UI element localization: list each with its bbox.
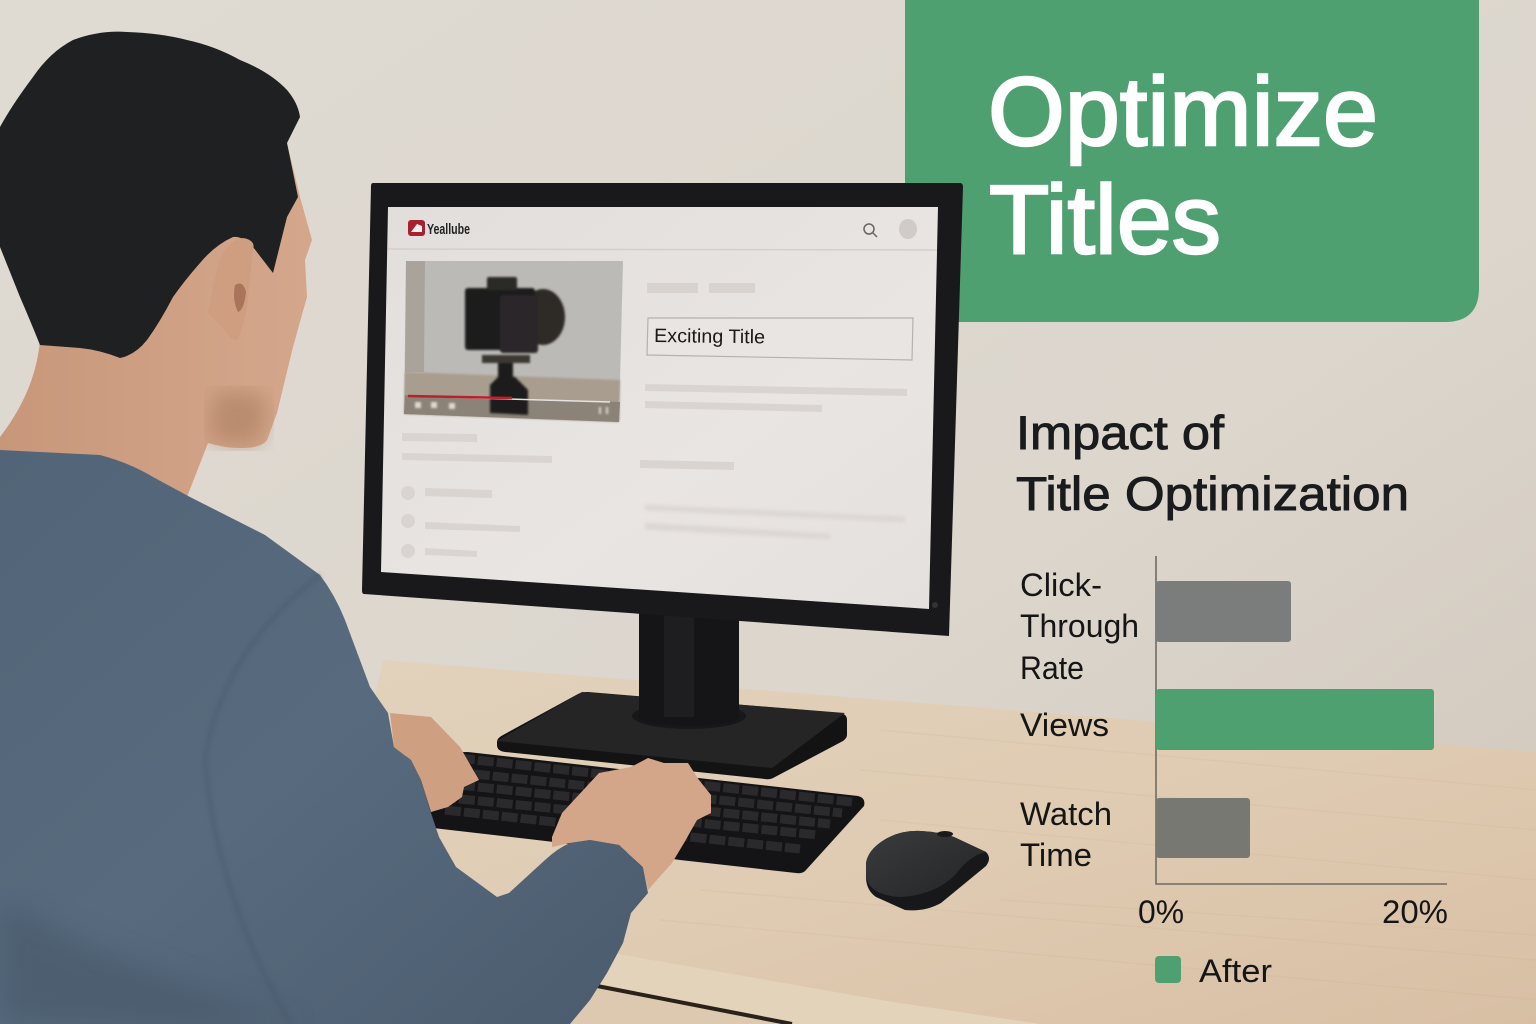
label: click-through rate [1020, 567, 1139, 686]
placeholder lines [401, 384, 907, 558]
label: click-through rate: Through [1020, 608, 1139, 644]
title input [647, 318, 913, 360]
axis label 0%: 0% [1138, 894, 1184, 930]
hair [0, 32, 300, 358]
chart heading [1016, 406, 1409, 520]
desk underside [570, 985, 790, 1024]
bar: views [1156, 689, 1434, 750]
site logo: Yeallube [427, 221, 470, 238]
site logo [408, 220, 470, 238]
label: watch time: Time [1020, 837, 1092, 873]
label: views: Views [1020, 707, 1109, 743]
monitor [362, 183, 963, 636]
title input: Exciting Title [654, 325, 765, 348]
chart heading: Impact of [1016, 406, 1225, 459]
camera [465, 277, 565, 415]
desk [285, 660, 1536, 1024]
title text: Optimize [988, 57, 1378, 166]
chart heading: Title Optimization [1016, 467, 1409, 520]
bar: click-through rate [1156, 581, 1291, 642]
label: click-through rate: Rate [1020, 650, 1084, 686]
search icon [864, 224, 877, 237]
sweater and arm [0, 450, 648, 1024]
screen [381, 207, 938, 609]
legend: After [1199, 953, 1272, 989]
mouse [866, 831, 989, 910]
bar: watch time [1156, 798, 1250, 858]
monitor stand [497, 605, 847, 779]
title text [988, 57, 1378, 274]
legend [1155, 953, 1272, 989]
sweater shading [205, 575, 320, 1024]
title panel [905, 0, 1479, 322]
video thumbnail [404, 261, 623, 422]
keyboard [405, 752, 864, 873]
label: click-through rate: Click- [1020, 567, 1102, 603]
neck and face [0, 143, 312, 525]
title text: Titles [989, 165, 1221, 274]
placeholder tags [647, 283, 755, 293]
desk front edge [558, 947, 1040, 1024]
label: watch time: Watch [1020, 796, 1112, 832]
label: watch time [1020, 796, 1112, 873]
avatar icon [899, 219, 917, 239]
axis label 20%: 20% [1382, 894, 1448, 930]
video player bar [408, 396, 610, 402]
left hand [390, 713, 479, 812]
right hand [552, 758, 711, 890]
ear [208, 238, 254, 340]
bar chart [1020, 556, 1448, 930]
axes [1156, 556, 1447, 884]
person [0, 32, 711, 1024]
